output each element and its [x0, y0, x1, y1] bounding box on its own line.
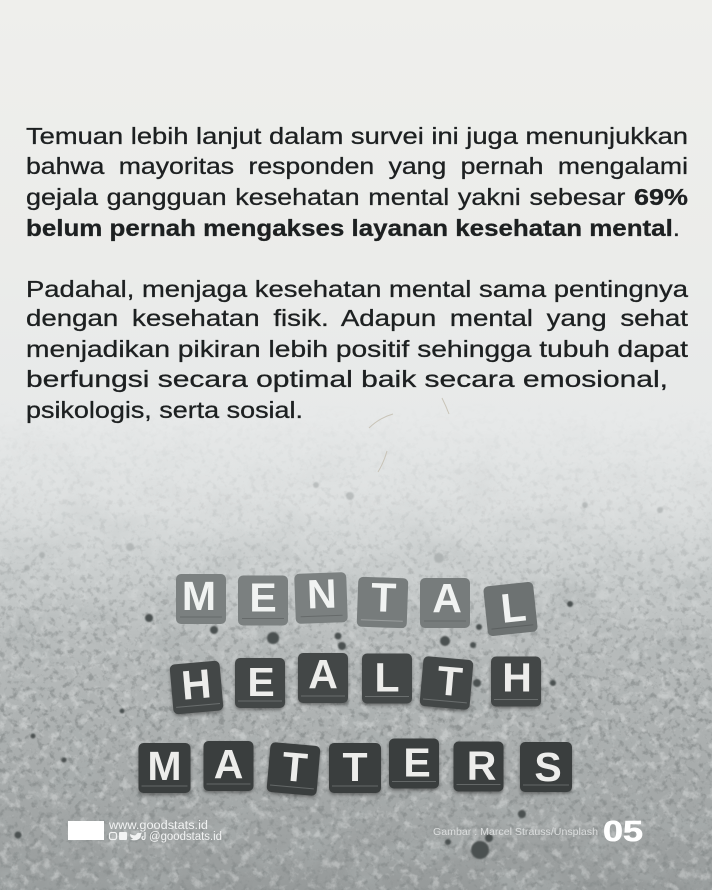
tile row: MENTAL: E	[249, 574, 277, 620]
footer: image credit: Gambar : Marcel Strauss/Unsplash	[433, 827, 598, 838]
tile row: MATTERS: T	[342, 744, 368, 790]
tile row: MATTERS: M	[147, 743, 182, 789]
tile row: MENTAL: N	[306, 570, 337, 617]
tile row: MATTERS: S	[534, 744, 562, 790]
text block: paragraph 2: berfungsi secara optimal baik secara emosional,	[26, 366, 668, 392]
tile row: MATTERS: T	[280, 743, 309, 791]
footer: website and social handles	[108, 820, 222, 843]
tile row: MENTAL: M	[182, 573, 216, 619]
text block: paragraph 1	[26, 123, 688, 241]
tile row: HEALTH: E	[247, 659, 275, 705]
text block: paragraph 1: bahwa mayoritas responden yang pernah mengalami	[26, 153, 688, 179]
tile row: HEALTH: L	[374, 654, 400, 700]
text block: paragraph 2: psikologis, serta sosial.	[26, 397, 303, 423]
tile row: HEALTH: H	[179, 660, 213, 709]
tile row: MENTAL: A	[432, 575, 462, 621]
tile row: MATTERS	[138, 738, 572, 798]
text block: paragraph 2: Padahal, menjaga kesehatan mental sama pentingnya	[26, 276, 688, 302]
tile row: MATTERS: E	[403, 740, 431, 786]
text block: paragraph 2: menjadikan pikiran lebih positif sehingga tubuh dapat	[26, 336, 689, 362]
tile row: MENTAL: T	[370, 574, 397, 621]
background: textured paper to granite gradient	[0, 398, 712, 890]
footer: website and social handles: @goodstats.id	[149, 831, 222, 843]
text block: paragraph 1: gejala gangguan kesehatan mental yakni sebesar 69%	[26, 184, 688, 210]
text block: paragraph 1: belum pernah mengakses layanan kesehatan mental .	[26, 215, 680, 241]
icons: social media	[110, 832, 145, 840]
tile row: MENTAL: L	[499, 584, 528, 632]
tile row: MATTERS: A	[214, 741, 243, 787]
text block: paragraph 2	[26, 276, 689, 423]
tile row: MATTERS: R	[467, 742, 496, 788]
text block: paragraph 1: Temuan lebih lanjut dalam survei ini juga menunjukkan	[26, 123, 688, 149]
tile row: HEALTH: A	[308, 651, 338, 697]
illustration: letter tiles spelling MENTAL HEALTH MATTERS	[138, 570, 572, 798]
tile row: HEALTH	[169, 651, 541, 717]
footer: logo placeholder block	[68, 821, 104, 840]
tile row: HEALTH: T	[435, 657, 464, 705]
tile row: HEALTH: H	[502, 654, 532, 700]
footer: website and social handles: www.goodstats.id	[108, 820, 208, 832]
tile row: MENTAL	[176, 570, 538, 636]
text block: paragraph 2: dengan kesehatan fisik. Adapun mental yang sehat	[26, 305, 689, 331]
footer: page number: 05	[603, 816, 643, 848]
